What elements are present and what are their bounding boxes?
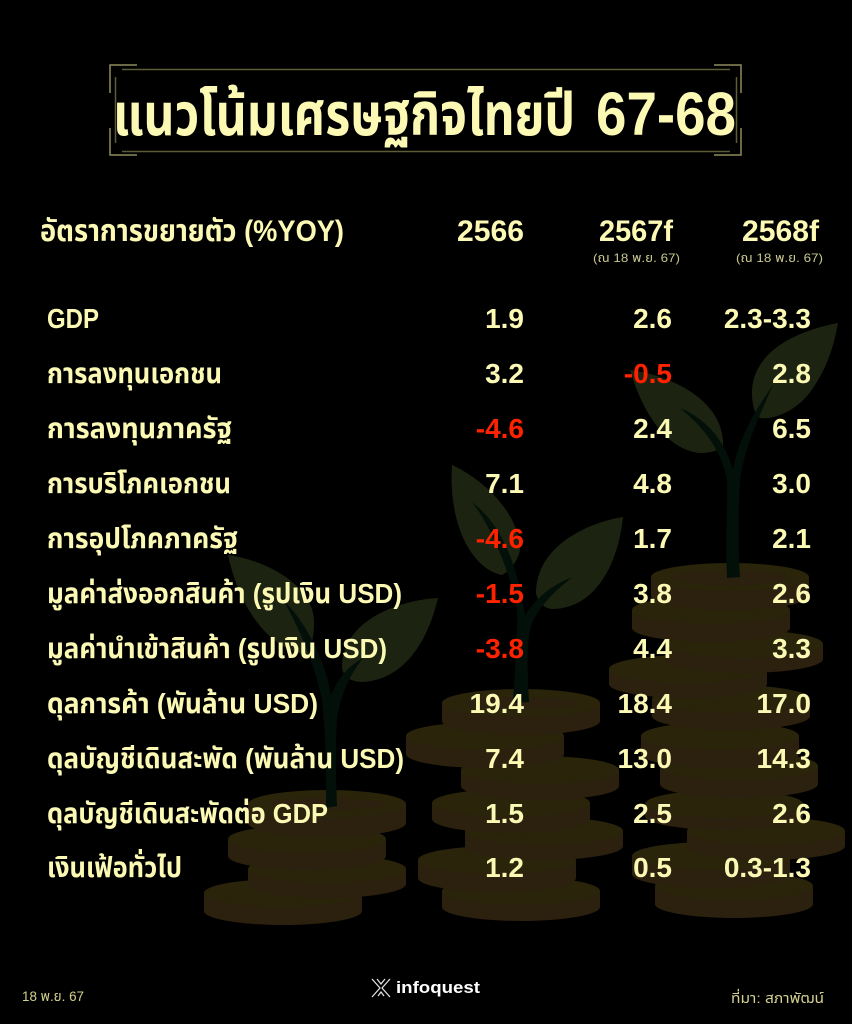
row: import value: 4.4 <box>633 633 672 664</box>
row: private consumption: 3.0 <box>772 468 811 499</box>
row: GDP: 1.9 <box>485 303 524 334</box>
row: current account: ดุลบัญชีเดินสะพัด (พันล้าน USD) <box>47 743 404 775</box>
row: current account to GDP: ดุลบัญชีเดินสะพัดต่อ GDP <box>47 798 328 830</box>
row: GDP <box>47 303 811 334</box>
row: GDP: GDP <box>47 303 99 334</box>
header: 2566: 2566 <box>457 215 524 248</box>
row: private consumption: การบริโภคเอกชน <box>47 468 231 499</box>
row: trade balance: 19.4 <box>470 688 524 719</box>
row: public investment <box>47 413 811 445</box>
footer: date: 18 พ.ย. 67 <box>22 988 84 1004</box>
row: export value: 2.6 <box>772 578 811 609</box>
row: export value: -1.5 <box>476 578 524 609</box>
row: public consumption: การอุปโภคภาครัฐ <box>47 523 238 555</box>
row: public consumption: 1.7 <box>633 523 672 554</box>
row: export value <box>47 578 811 611</box>
table rows <box>47 303 811 883</box>
row: public investment: -4.6 <box>476 413 524 444</box>
row: headline inflation <box>47 848 811 883</box>
row: import value: -3.8 <box>476 633 524 664</box>
row: headline inflation: 0.3-1.3 <box>724 852 811 883</box>
row: current account: 14.3 <box>756 743 811 774</box>
row: export value: 3.8 <box>633 578 672 609</box>
illustration: right plant on coin stack <box>609 323 845 918</box>
row: GDP: 2.3-3.3 <box>724 303 811 334</box>
header: growth rate label: อัตราการขยายตัว (%YOY) <box>40 215 344 248</box>
row: private consumption: 4.8 <box>633 468 672 499</box>
table header <box>40 215 823 265</box>
header note: 2567f date: (ณ 18 พ.ย. 67) <box>593 251 680 265</box>
header: 2568f: 2568f <box>742 215 820 248</box>
row: current account <box>47 743 811 775</box>
row: public investment: การลงทุนภาครัฐ <box>47 413 232 445</box>
row: current account: 13.0 <box>618 743 672 774</box>
footer: infoquest logo <box>372 978 480 997</box>
row: headline inflation: เงินเฟ้อทั่วไป <box>47 848 182 883</box>
row: import value: มูลค่านำเข้าสินค้า (รูปเงิน USD) <box>47 633 387 666</box>
row: current account to GDP <box>47 798 811 830</box>
row: public investment: 2.4 <box>633 413 672 444</box>
row: trade balance: 18.4 <box>618 688 672 719</box>
row: private investment: 2.8 <box>772 358 811 389</box>
title: Thai words: แนวโน้มเศรษฐกิจไทยปี <box>113 81 575 148</box>
row: private consumption <box>47 468 811 499</box>
header note: 2568f date: (ณ 18 พ.ย. 67) <box>736 251 823 265</box>
row: current account to GDP: 1.5 <box>485 798 524 829</box>
row: import value <box>47 633 811 666</box>
row: headline inflation: 0.5 <box>633 852 672 883</box>
row: headline inflation: 1.2 <box>485 852 524 883</box>
row: import value: 3.3 <box>772 633 811 664</box>
row: trade balance: ดุลการค้า (พันล้าน USD) <box>47 688 318 720</box>
title frame <box>110 65 741 155</box>
row: private investment: 3.2 <box>485 358 524 389</box>
row: trade balance <box>47 688 811 720</box>
row: public investment: 6.5 <box>772 413 811 444</box>
wordmark: infoquest <box>396 978 480 997</box>
row: GDP: 2.6 <box>633 303 672 334</box>
row: private consumption: 7.1 <box>485 468 524 499</box>
row: current account to GDP: 2.5 <box>633 798 672 829</box>
title: years: 67-68 <box>596 80 736 148</box>
row: public consumption: 2.1 <box>772 523 811 554</box>
icon: infoquest X mark <box>372 979 390 997</box>
row: current account: 7.4 <box>485 743 524 774</box>
illustration: middle plant on coin stack <box>406 465 623 921</box>
header: 2567f: 2567f <box>599 215 674 248</box>
row: private investment <box>47 358 811 390</box>
row: public consumption <box>47 523 811 555</box>
footer: source: ที่มา: สภาพัฒน์ <box>731 988 824 1006</box>
title <box>113 80 736 148</box>
row: private investment: -0.5 <box>624 358 672 389</box>
row: public consumption: -4.6 <box>476 523 524 554</box>
row: private investment: การลงทุนเอกชน <box>47 358 222 390</box>
row: export value: มูลค่าส่งออกสินค้า (รูปเงิน USD) <box>47 578 402 611</box>
illustration: left plant on coin stack <box>204 555 438 925</box>
row: trade balance: 17.0 <box>756 688 811 719</box>
row: current account to GDP: 2.6 <box>772 798 811 829</box>
